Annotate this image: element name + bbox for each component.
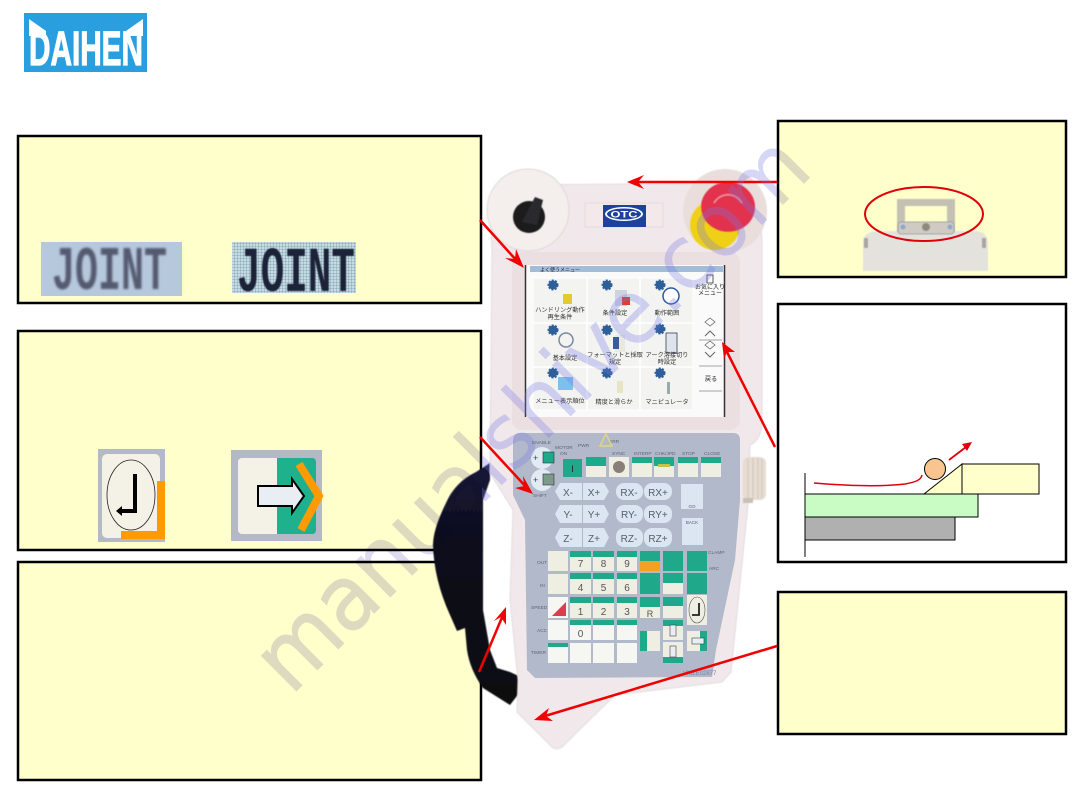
shift and enable keys — [531, 447, 554, 491]
numeric keypad: 4 — [578, 583, 584, 594]
screen side menu: お気に入り — [695, 283, 725, 291]
arrow: ball direction — [949, 442, 972, 460]
screen side menu: 戻る — [705, 376, 717, 383]
screen menu grid: ハンドリング動作 — [535, 306, 585, 314]
screen side menu: メニュー — [698, 290, 722, 297]
keypad labels: CLOSE — [704, 451, 720, 457]
keypad labels: PWR — [578, 443, 590, 449]
jog key labels: RZ+ — [648, 534, 668, 545]
jog key labels: RX+ — [648, 488, 668, 499]
jog key labels — [563, 488, 698, 545]
panel: JOINT display comparison — [18, 136, 481, 311]
image: sharp JOINT — [232, 239, 356, 311]
keypad labels — [531, 439, 725, 677]
keypad labels: ON — [560, 451, 568, 457]
jog key labels: Z- — [563, 534, 573, 545]
keypad labels: OUT — [537, 560, 547, 566]
body — [490, 183, 762, 749]
image: sharp JOINT: JOINT — [237, 239, 355, 311]
screen menu grid: 動作範囲 — [655, 309, 679, 317]
numeric keypad: 5 — [601, 583, 607, 594]
panel: strap notes — [18, 562, 481, 780]
diagram: yellow block — [962, 464, 1039, 494]
numeric keypad: 3 — [624, 607, 630, 618]
numeric keypad: 1 — [578, 607, 584, 618]
keypad labels: MOTOR — [555, 445, 573, 451]
arrow: keypad — [480, 437, 533, 494]
numeric keypad: 9 — [624, 559, 630, 570]
jog key labels: BACK — [686, 520, 698, 525]
screen menu grid: アーク溶接切り — [646, 351, 688, 359]
jog key labels: RY+ — [648, 510, 668, 521]
OTC logo — [603, 205, 646, 227]
keypad labels: SPEED — [531, 605, 548, 611]
watermark: manualshive.com — [232, 114, 830, 712]
shift and enable keys: + — [533, 453, 538, 463]
image: pendant rear with hook — [863, 199, 988, 271]
keypad panel — [513, 433, 740, 678]
screen menu grid: 精度と滑らか — [595, 398, 633, 406]
image: blurred JOINT — [41, 237, 182, 308]
key switch — [513, 197, 545, 233]
emergency stop — [690, 182, 755, 250]
logo: DAIHEN — [24, 13, 147, 76]
right function keys: R — [647, 609, 654, 619]
top function keys — [563, 457, 721, 477]
screen menu grid: フォーマットと採取 — [587, 351, 644, 359]
diagram: green layer — [805, 494, 978, 517]
arrow: top of pendant — [627, 175, 777, 189]
screen title bar: よく使うメニュー — [540, 266, 580, 274]
OTC logo: OTC — [610, 210, 638, 220]
screen menu grid: 規定 — [609, 358, 621, 366]
warning triangle — [600, 434, 612, 446]
name plate — [585, 203, 663, 227]
keypad labels: SHIFT — [533, 493, 547, 499]
screen — [525, 265, 725, 417]
screen menu grid: 条件設定 — [603, 309, 627, 317]
panel: key comparison — [18, 331, 481, 550]
jog key labels: RY- — [621, 510, 637, 521]
panel: pen tray diagram — [778, 304, 1066, 562]
arrow: connector — [534, 646, 777, 721]
bevel — [512, 252, 740, 430]
keypad labels: ARC — [709, 566, 720, 572]
keypad labels: CLAMP — [708, 550, 725, 556]
keypad labels: CHK/JPD — [655, 451, 676, 457]
logo: DAIHEN: DAIHEN — [29, 23, 143, 76]
jog key labels: X+ — [588, 488, 600, 499]
arrow: strap — [479, 607, 506, 672]
keypad labels: VMZE02877 — [683, 671, 717, 677]
left knob housing — [487, 169, 569, 251]
shift and enable keys: + — [533, 475, 538, 485]
callout ellipse — [865, 187, 983, 241]
arrow: side menu — [722, 342, 775, 447]
watermark: manualshive.com — [232, 114, 830, 712]
diagram: ball — [924, 458, 946, 480]
side dial — [743, 457, 766, 503]
jog key labels: Y+ — [588, 510, 600, 521]
jog key labels: GO — [688, 504, 696, 509]
jog key labels: RX- — [620, 488, 638, 499]
jog key labels: X- — [563, 488, 573, 499]
diagram: grey layer — [805, 517, 955, 540]
numeric keypad: 2 — [601, 607, 607, 618]
numeric keypad: 0 — [578, 629, 584, 640]
screen title bar — [530, 266, 723, 274]
screen menu grid — [533, 278, 693, 410]
keypad labels: IN — [540, 583, 545, 589]
screen menu grid: マニピュレータ — [645, 398, 689, 406]
numeric keypad: 7 — [578, 559, 584, 570]
diagram: ramp — [924, 464, 962, 494]
arrow: screen — [480, 220, 524, 268]
jog key labels: RZ- — [621, 534, 637, 545]
numeric keypad: 8 — [601, 559, 607, 570]
strap — [433, 463, 523, 705]
jog keys — [555, 483, 703, 547]
pendant device — [487, 169, 767, 749]
icon: enter key with orange marker — [98, 449, 165, 542]
screen menu grid: 再生条件 — [548, 313, 572, 321]
diagram: red trajectory — [814, 475, 922, 486]
keypad labels: ACC — [537, 628, 548, 634]
right function keys — [640, 551, 707, 663]
screen menu grid: メニュー表示順位 — [535, 397, 585, 405]
icon: arrow key with orange chevron — [231, 450, 322, 541]
diagram: wall line — [804, 473, 806, 557]
panel: connector notes — [778, 592, 1066, 734]
keypad labels: INTERP — [634, 451, 652, 457]
keypad labels: ERR — [609, 439, 620, 445]
top function keys: I — [571, 464, 574, 474]
keypad labels: TIMER — [531, 650, 546, 656]
numeric keypad — [548, 551, 637, 663]
right knob housing — [683, 169, 767, 253]
screen menu grid: 基本設定 — [553, 354, 577, 362]
keypad labels: STOP — [682, 451, 695, 457]
panel: hanger — [778, 121, 1066, 277]
watermark: manualshive.com — [232, 114, 830, 712]
jog key labels: Z+ — [588, 534, 600, 545]
jog key labels: Y- — [563, 510, 573, 521]
screen side menu — [695, 275, 725, 391]
keypad labels: SYNC — [612, 451, 626, 457]
numeric keypad: 6 — [624, 583, 630, 594]
screen menu grid: 時設定 — [658, 359, 676, 366]
keypad labels: ENABLE — [532, 440, 551, 446]
image: blurred JOINT: JOINT — [52, 237, 167, 308]
